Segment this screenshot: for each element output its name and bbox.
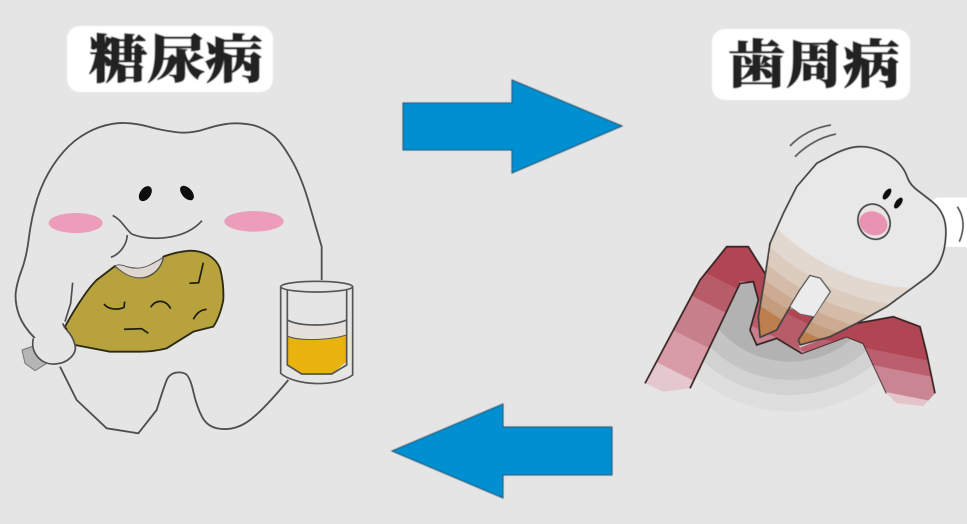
title: diabetes (67, 26, 273, 92)
open mouth (852, 199, 896, 245)
arrow: right (403, 80, 622, 173)
title: periodontal disease: 歯周病 (728, 37, 900, 95)
title: periodontal disease (712, 29, 910, 100)
motion lines (790, 125, 963, 242)
white side label (930, 197, 967, 247)
gum right (800, 317, 935, 406)
gum left (645, 247, 813, 392)
eyes (881, 187, 904, 210)
gap between roots (790, 276, 830, 317)
potato (65, 251, 223, 352)
cheeks (49, 211, 284, 233)
arrow: left (392, 404, 612, 498)
tooth outline (16, 123, 322, 433)
tooth body with shaded bands (757, 146, 947, 346)
mouth (111, 215, 202, 257)
illustration: tooth eating and drinking (16, 123, 353, 433)
arm and hand (22, 283, 75, 371)
bone (704, 282, 874, 396)
eyes (136, 183, 197, 204)
glass of drink (281, 281, 353, 384)
illustration: loose tooth in gums (644, 124, 967, 406)
gum right outline (857, 317, 935, 393)
gum left outline (645, 247, 887, 393)
title: diabetes: 糖尿病 (89, 32, 263, 90)
